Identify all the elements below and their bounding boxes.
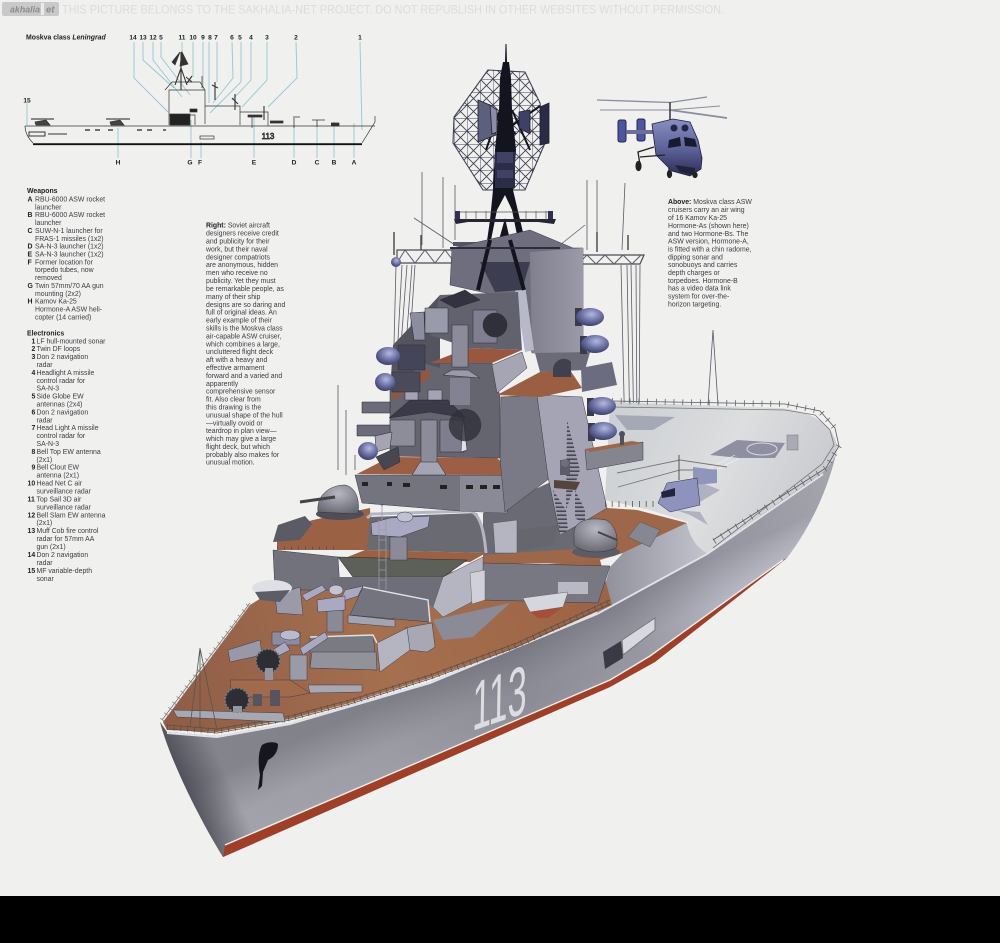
electronics numbers: 8 (208, 34, 212, 42)
text block: right caption: —virtually ovoid or (206, 420, 263, 427)
text block: weapons and electronics key: launcher (35, 220, 62, 227)
RBU rocket launchers (225, 649, 280, 712)
ship profile (25, 52, 375, 144)
mast platform (453, 211, 560, 248)
middle column (450, 378, 470, 405)
fuselage (652, 119, 702, 176)
text block: weapons and electronics key: Electronics (27, 330, 64, 338)
curved tub (338, 557, 467, 577)
text block: right caption: aft with a heavy and (206, 357, 267, 364)
text block: above caption: horizon targeting. (668, 301, 721, 308)
text block: weapons and electronics key: 12 (28, 512, 35, 519)
aft hull and flight deck (605, 402, 837, 553)
electronics numbers: 14 (129, 34, 137, 42)
text block: right caption: many of their ship (206, 294, 261, 301)
rotating radar panels (478, 100, 549, 145)
text block: weapons and electronics key: Muff Cob fire control (36, 528, 99, 535)
wall below top director deck (492, 352, 527, 393)
raised forward block (330, 577, 447, 610)
text block: weapons and electronics key: Bell Top EW antenna (36, 449, 101, 456)
text block: right caption: designers receive credit (206, 230, 279, 238)
text block: weapons and electronics key: Hormone-A ASW heli- (35, 306, 102, 314)
text block: weapons and electronics key: Kamov Ka-25 (35, 298, 77, 306)
text block: weapons and electronics key: 3 (32, 354, 36, 361)
text block: right caption: designs are so daring and (206, 302, 285, 309)
text block: weapons and electronics key: Top Sail 3D air (36, 496, 82, 504)
text block: right caption: fit. Also clear from (206, 397, 261, 404)
text block: weapons and electronics key: gun (2x1) (36, 544, 66, 551)
text block: weapons and electronics key: control radar for (36, 433, 86, 440)
yardarm trusses (391, 250, 644, 267)
text block: weapons and electronics key: SA-N-3 launcher (1x2) (35, 244, 104, 251)
text block: right caption: air-capable ASW cruiser, (206, 333, 282, 340)
text block: right caption: designer compatriots (206, 254, 271, 261)
text block: weapons and electronics key: F (28, 259, 32, 266)
upper right equipment deck (581, 362, 617, 392)
door block (493, 520, 517, 553)
forward superstructure side block (273, 550, 340, 590)
weapon letters (116, 160, 357, 166)
forward gun deck (277, 508, 372, 550)
text block: weapons and electronics key: 13 (28, 528, 35, 535)
electronics numbers: 15 (23, 98, 31, 104)
text block: weapons and electronics key: C (28, 228, 32, 235)
text block: weapons and electronics key: RBU-6000 ASW rocket (35, 212, 105, 219)
text block: right caption: effective armament (206, 365, 265, 372)
text block: right caption: uncluttered flight deck (206, 349, 274, 356)
text block: weapons and electronics key: Head Light A missile (36, 425, 99, 432)
text block: weapons and electronics key: SA-N-3 launcher (1x2) (35, 252, 104, 258)
text block: right caption: unusual shape of the hull (206, 412, 283, 419)
text block: right caption: teardrop in plan view— (206, 428, 277, 435)
launcher C SUW-N-1 (302, 585, 363, 632)
text block: weapons and electronics key: D (28, 244, 32, 251)
weapon letters: B (332, 160, 337, 166)
text block: weapons and electronics key: copter (14 carried) (35, 314, 91, 322)
upper tower block (450, 230, 583, 353)
text block: above caption (668, 199, 752, 308)
text block: weapons and electronics key: control radar for (36, 378, 86, 385)
diagram title: Moskva class Leningrad (26, 34, 106, 42)
electronics numbers: 6 (230, 34, 234, 42)
forward deck railing (162, 600, 610, 733)
text block: weapons and electronics key: MF variable-depth (36, 568, 92, 575)
text block: weapons and electronics key: LF hull-mounted sonar (36, 338, 106, 346)
port upper equipment shelf (357, 345, 425, 470)
text block: weapons and electronics key: sonar (36, 576, 54, 583)
text block: weapons and electronics key: surveillance radar (36, 488, 92, 496)
text block: right caption: flight deck, but which (206, 444, 270, 451)
text block: weapons and electronics key: Twin DF loops (36, 346, 81, 353)
text block: weapons and electronics key: 7 (32, 425, 36, 432)
hull shading (160, 445, 838, 857)
starboard shelf (535, 352, 590, 372)
text block: weapons and electronics key: Head Net C air (36, 480, 83, 488)
decoy rack aft (628, 522, 660, 547)
text block: right caption: probably also makes for (206, 452, 280, 459)
watermark banner: THIS PICTURE BELONGS TO THE SAKHALIA-NET PROJECT. DO NOT REPUBLISH IN OTHER WEBSITES WITHOUT PERMISSION. (62, 2, 724, 16)
text block: weapons and electronics key: radar (36, 417, 53, 424)
ship's boat midships (523, 582, 588, 618)
text block: above caption: Hormone-As (shown here) (668, 223, 749, 230)
text block: weapons and electronics key: Don 2 navigation (36, 552, 88, 559)
text block: right caption: publicity. Yet they must (206, 278, 276, 285)
text block: above caption: and two Hormone-Bs. The (668, 231, 748, 238)
forward deck (163, 560, 612, 732)
aft deck railing (605, 501, 655, 507)
flight deck details (615, 415, 798, 525)
light tower fin (515, 285, 534, 352)
text block: right caption: forward and a varied and (206, 373, 282, 380)
lower launcher E (371, 512, 430, 560)
rotor blades (597, 97, 727, 118)
text block: weapons and electronics key: (2x1) (36, 520, 52, 527)
text block: weapons and electronics key: torpedo tubes, now (35, 267, 94, 274)
gallery brown deck (357, 457, 513, 475)
text block: weapons and electronics key: 14 (28, 552, 35, 559)
text block: weapons and electronics key: Headlight A missile (36, 370, 95, 377)
text block: right caption: Right: Soviet aircraft (206, 222, 270, 230)
illustration: Kamov Ka-25 helicopter (597, 97, 727, 178)
gallery block with windows (355, 472, 515, 513)
electronics numbers: 11 (179, 34, 186, 42)
hull number 113: 113 (472, 650, 527, 746)
text block: right caption: skills is the Moskva class (206, 326, 283, 332)
text block: weapons and electronics key: RBU-6000 ASW rocket (35, 196, 105, 204)
text block: right caption: this drawing is the (206, 404, 261, 412)
text block: weapons and electronics key: 4 (32, 370, 36, 377)
weapon letters: E (252, 160, 257, 166)
text block: above caption: torpedoes. Hormone-B (668, 278, 738, 285)
anchor recess (258, 742, 278, 790)
text block: right caption: and publicity for their (206, 238, 270, 246)
ship profile: 113 (262, 132, 275, 141)
text block: weapons and electronics key: Don 2 navigation (36, 410, 88, 416)
upper mast base detail (450, 240, 560, 292)
text block: weapons and electronics key: Weapons (27, 188, 58, 195)
black footer band (0, 896, 1000, 943)
long starboard wall (483, 563, 610, 603)
weapon letters: C (315, 160, 320, 166)
flight deck railing (612, 401, 839, 548)
text block: weapons and electronics key: Former location for (35, 259, 94, 266)
text block: weapons and electronics key: SUW-N-1 launcher for (35, 228, 103, 235)
text block: weapons and electronics key: 1 (32, 338, 36, 346)
57mm gun turret (300, 485, 364, 520)
side wall below aft gun deck (597, 523, 707, 613)
aft gun deck and rear strip (483, 508, 687, 564)
decoy rack (273, 516, 312, 542)
text block: weapons and electronics key: SA-N-3 (36, 441, 59, 448)
text block: weapons and electronics key: 9 (32, 464, 36, 472)
text block: weapons and electronics key: Bell Clout EW (36, 464, 80, 472)
text block: weapons and electronics key: radar (36, 362, 53, 369)
electronics numbers: 5 (238, 34, 242, 42)
text block: weapons and electronics key: Side Globe EW (36, 394, 84, 400)
text block: weapons and electronics key: E (28, 252, 32, 258)
text block: weapons and electronics key (27, 188, 106, 583)
text block: right caption: comprehensive sensor (206, 389, 276, 396)
electronics numbers: 10 (189, 34, 197, 42)
text block: weapons and electronics key: removed (35, 275, 62, 282)
text block: weapons and electronics key: 6 (32, 410, 36, 416)
text block: weapons and electronics key: FRAS-1 missiles (1x2) (35, 236, 104, 243)
text block: right caption: apparently (206, 381, 239, 388)
undercarriage (636, 147, 697, 178)
illustration: Moskva class cruiser Leningrad (160, 44, 839, 857)
upper tower right face (530, 248, 583, 353)
text block: weapons and electronics key: B (28, 212, 32, 219)
text block: weapons and electronics key: SA-N-3 (36, 386, 59, 393)
text block: weapons and electronics key: Don 2 navigation (36, 354, 88, 361)
text block: above caption: Above: Moskva class ASW (668, 199, 752, 206)
tower side face (500, 395, 550, 512)
radar lattice Top Sail (453, 70, 545, 190)
text block: right caption: early example of their (206, 318, 273, 325)
text block: above caption: sonobuoys and carries (668, 262, 738, 269)
brown deck right mid (497, 370, 582, 397)
electronics numbers: 12 (149, 34, 157, 42)
electronics numbers: 1 (358, 34, 362, 42)
text block: right caption (205, 222, 285, 466)
text block: weapons and electronics key: H (28, 298, 32, 306)
side-view diagram of Leningrad (23, 34, 375, 166)
hull side opening (603, 618, 655, 669)
upper fire control director (410, 290, 507, 378)
electronics numbers: 4 (249, 34, 253, 42)
light door block (470, 570, 485, 604)
text block: weapons and electronics key: antennas (2x4) (36, 402, 82, 409)
electronics numbers: 3 (265, 34, 269, 42)
text block: weapons and electronics key: 15 (28, 568, 35, 575)
electronics numbers: 9 (201, 34, 205, 42)
watermark banner: et (46, 4, 55, 16)
boot-topping stripe (223, 558, 787, 857)
text block: above caption: depth charges or (668, 270, 720, 277)
launcher deck walls (173, 587, 435, 722)
louvre panels (553, 420, 585, 535)
weapon letters: F (198, 160, 202, 166)
text block: right caption: unusual motion. (206, 460, 255, 466)
text block: above caption: is fitted with a chin radome, (668, 246, 752, 253)
text block: above caption: of 16 Kamov Ka-25 (668, 215, 727, 222)
weapon letters: H (116, 160, 121, 166)
text block: above caption: dipping sonar and (668, 254, 723, 261)
text block: weapons and electronics key: 10 (28, 480, 35, 488)
wall edge highlight (310, 587, 430, 643)
text block: weapons and electronics key: G (28, 283, 33, 290)
text block: weapons and electronics key: mounting (2x2) (35, 291, 81, 298)
text block: weapons and electronics key: A (28, 196, 32, 204)
port side backing structure (390, 295, 440, 392)
bow tripod mast (190, 648, 217, 730)
electronics numbers: 7 (214, 34, 218, 42)
electronics numbers: 2 (294, 34, 298, 42)
text block: right caption: which combines a large, (205, 341, 280, 348)
tower light face (537, 395, 607, 535)
text block: right caption: are anonymous, hidden (206, 262, 278, 269)
text block: weapons and electronics key: 8 (32, 449, 36, 456)
text block: weapons and electronics key: surveillance radar (36, 504, 92, 512)
tower louvres lower (513, 525, 560, 552)
weapon letters: G (187, 160, 193, 166)
cockpit windows (668, 137, 697, 148)
brown deck top director (430, 348, 522, 363)
helicopter on deck (617, 455, 727, 512)
text block: weapons and electronics key: 2 (32, 346, 36, 353)
text block: right caption: men who receive no (206, 270, 268, 277)
text block: weapons and electronics key: launcher (35, 204, 62, 211)
text block: right caption: be remarkable people, as (206, 286, 284, 293)
Don 2 radar and small mountings (553, 359, 625, 490)
ship's boat forward (252, 580, 292, 602)
text block: above caption: ASW version, Hormone-A, (668, 239, 749, 246)
electronics numbers (23, 34, 362, 104)
electronics numbers: 5 (159, 34, 163, 42)
text block: right caption: full of original ideas. An (206, 310, 277, 317)
text block: above caption: cruisers carry an air wing (668, 207, 745, 214)
right 57mm gun turret (572, 519, 620, 558)
text block: weapons and electronics key: Bell Slam EW antenna (36, 512, 106, 519)
text block: right caption: which may give a large (205, 436, 276, 443)
text block: right caption: work, but their naval (205, 246, 268, 253)
text block: weapons and electronics key: 11 (28, 496, 35, 504)
watermark banner: akhalia (10, 4, 40, 16)
text block: weapons and electronics key: 5 (32, 394, 36, 400)
weapon letters: A (352, 160, 357, 166)
text block: weapons and electronics key: radar (36, 560, 53, 567)
main mast (478, 44, 540, 290)
middle gallery decks (392, 370, 430, 400)
deck edge highlight (167, 474, 823, 737)
ladder mast (376, 473, 388, 590)
text block: above caption: has a video data link (668, 286, 731, 293)
leader lines (27, 42, 362, 158)
electronics numbers: 13 (139, 34, 147, 42)
lower fire control director (389, 390, 481, 475)
text block: above caption: system for over-the- (668, 294, 729, 300)
text block: weapons and electronics key: (2x1) (36, 457, 52, 464)
radio antennas and wires (338, 172, 718, 475)
waterline (225, 560, 783, 845)
weapon letters: D (292, 160, 297, 166)
main hull (160, 445, 838, 857)
truss stair structure (433, 603, 510, 640)
arch wall (367, 511, 486, 553)
text block: weapons and electronics key: Twin 57mm/70 AA gun (35, 283, 104, 290)
Side Globe EW domes (358, 308, 617, 460)
text block: weapons and electronics key: radar for 57mm AA (36, 536, 95, 543)
sponson (585, 441, 643, 470)
tail fins (618, 119, 655, 142)
launcher D SA-N-3 (265, 630, 328, 680)
light bulkhead (433, 557, 483, 617)
deck rail (277, 546, 340, 550)
rear brown strip (345, 550, 486, 562)
lower tower block (483, 480, 590, 555)
mid upper block (430, 292, 522, 350)
mid tower main block (390, 363, 500, 458)
text block: weapons and electronics key: antenna (2x1) (36, 472, 79, 480)
